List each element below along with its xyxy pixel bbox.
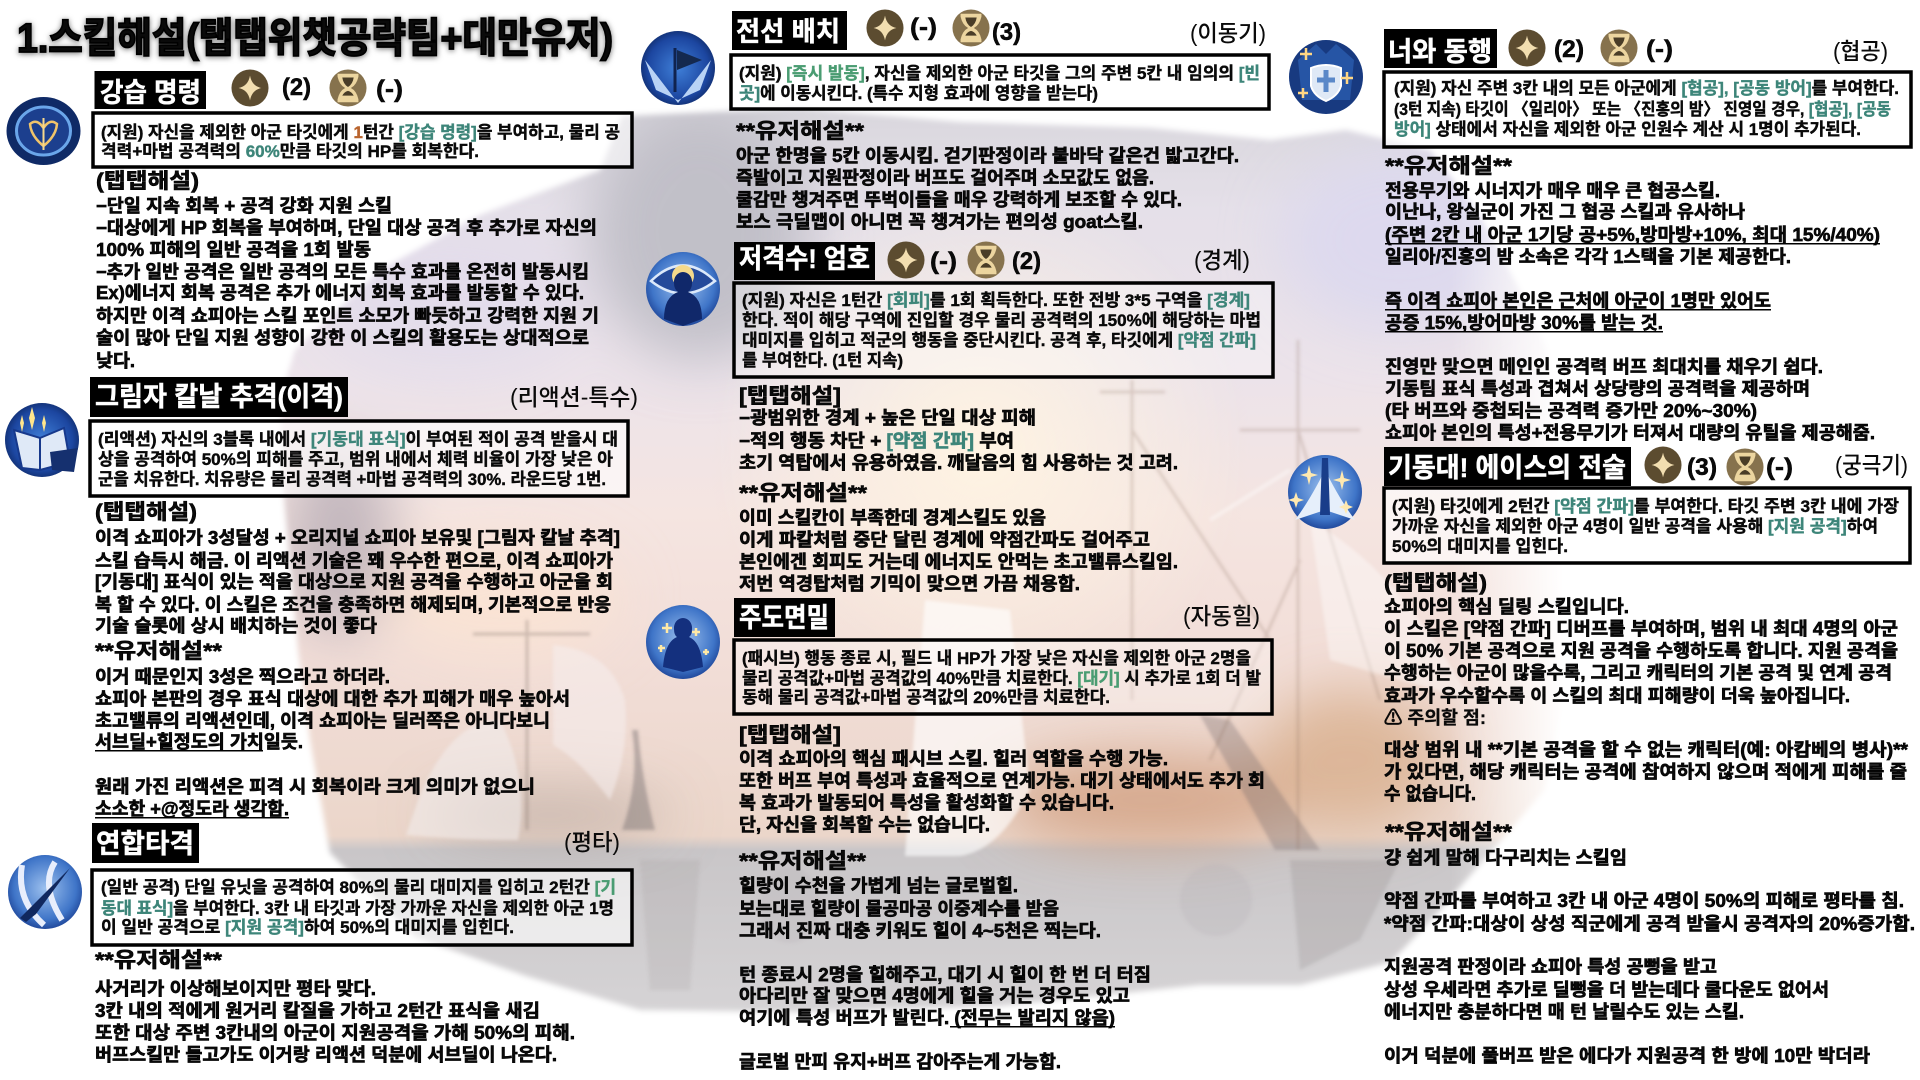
- commentary: 유저해설: 사거리가 이상해보이지만 평타 맞다.: [95, 979, 376, 999]
- commentary: 탭탭해설: 기술 슬롯에 상시 배치하는 것이 좋다: [95, 616, 377, 636]
- energy cost: (3): [1687, 454, 1717, 481]
- commentary: 유저해설: 공증 15%,방어마방 30%를 받는 것.: [1385, 313, 1663, 333]
- skill description box: 50%의 대미지를 입힌다.: [1392, 537, 1568, 556]
- commentary: 탭탭해설: [탭탭해설]: [739, 724, 841, 747]
- commentary: 탭탭해설: 대상 범위 내 **기본 공격을 할 수 없는 캐릭터(예: 아캄베의 병사)**: [1384, 740, 1908, 760]
- cooldown: (-): [376, 76, 403, 103]
- commentary: 유저해설: [736, 120, 1239, 232]
- skill description box: 이 일반 공격으로 [지원 공격]하여 50%의 대미지를 입힌다.: [101, 918, 514, 937]
- commentary: 탭탭해설: [739, 724, 1265, 835]
- commentary: 탭탭해설: −추가 일반 공격은 일반 공격의 모든 특수 효과를 온전히 발동시킴: [96, 262, 589, 282]
- commentary: 유저해설: 진영만 맞으면 메인인 공격력 버프 최대치를 채우기 쉽다.: [1385, 357, 1823, 377]
- commentary: 유저해설: 즉 이격 쇼피아 본인은 근처에 아군이 1명만 있어도: [1385, 291, 1771, 311]
- commentary: 탭탭해설: [96, 170, 599, 371]
- commentary: 탭탭해설: [1384, 572, 1908, 804]
- commentary: 유저해설: **유저해설**: [1385, 155, 1513, 178]
- panel: 너와 동행: [1289, 29, 1911, 443]
- energy cost: (-): [930, 248, 957, 275]
- icon: 기동대 에이스의 전술 skill: [1288, 455, 1362, 529]
- commentary: 유저해설: 소소한 +@정도라 생각함.: [95, 799, 289, 819]
- commentary: 유저해설: [95, 949, 575, 1065]
- commentary: 유저해설: [95, 640, 570, 819]
- skill name: 그림자 칼날 추격(이격): 그림자 칼날 추격(이격): [95, 382, 343, 412]
- commentary: 유저해설: **유저해설**: [736, 120, 865, 143]
- skill description box: (3턴 지속) 타깃이 〈일리아〉 또는 〈진홍의 밤〉 진영일 경우, [협공], [공동: [1394, 100, 1891, 119]
- commentary: 유저해설: 전용무기와 시너지가 매우 매우 큰 협공스킬.: [1385, 181, 1720, 201]
- commentary: 탭탭해설: −단일 지속 회복 + 공격 강화 지원 스킬: [96, 196, 392, 216]
- commentary: 유저해설: 지원공격 판정이라 쇼피아 특성 공뻥을 받고: [1384, 957, 1717, 977]
- panel: 저격수! 엄호: [646, 241, 1273, 594]
- commentary: 탭탭해설: 복 효과가 발동되어 특성을 활성화할 수 있습니다.: [739, 793, 1114, 813]
- commentary: 탭탭해설: 가 있다면, 해당 캐릭터는 공격에 참여하지 않으며 적에게 피해를 줄: [1384, 762, 1907, 782]
- commentary: 탭탭해설: 낮다.: [96, 351, 135, 371]
- skill type tag: (자동힐): [1183, 603, 1260, 629]
- commentary: 유저해설: 아군 한명을 5칸 이동시킴. 걷기판정이라 불바닥 같은건 밟고간다.: [736, 146, 1239, 166]
- commentary: 유저해설: 일리아/진홍의 밤 소속은 각각 1스택을 기본 제공한다.: [1385, 247, 1791, 267]
- commentary: 유저해설: 본인에겐 회피도 거는데 에너지도 안먹는 초고밸류스킬임.: [739, 552, 1178, 572]
- commentary: 유저해설: **유저해설**: [95, 640, 223, 663]
- commentary: 유저해설: 약점 간파를 부여하고 3칸 내 아군 4명이 50%의 피해로 평타를 침.: [1384, 891, 1904, 911]
- cooldown: [952, 9, 1021, 47]
- skill type tag: (경계): [1194, 247, 1250, 273]
- commentary: 유저해설: **유저해설**: [739, 482, 868, 505]
- commentary: 탭탭해설: (탭탭해설): [1384, 572, 1487, 595]
- commentary: 탭탭해설: 이격 쇼피아가 3성달성 + 오리지널 쇼피아 보유및 [그림자 칼날 추격]: [95, 528, 620, 548]
- cooldown: (-): [1766, 454, 1793, 481]
- skill description box: (지원) 자신은 1턴간 [회피]를 1회 획득한다. 또한 전방 3*5 구역을 [경계]: [742, 291, 1250, 310]
- commentary: 유저해설: 턴 종료시 2명을 힐해주고, 대기 시 힐이 한 번 더 터짐: [739, 965, 1151, 985]
- skill description box: [734, 283, 1273, 377]
- commentary: 유저해설: [1385, 155, 1880, 443]
- commentary: 유저해설: 기동팀 표식 특성과 겹쳐서 상당량의 공격력을 제공하며: [1385, 379, 1810, 399]
- commentary: 탭탭해설: [95, 501, 620, 636]
- commentary: 탭탭해설: (탭탭해설): [96, 170, 199, 193]
- skill name: 연합타격: 연합타격: [96, 829, 194, 859]
- energy cost: (-): [910, 14, 937, 41]
- commentary: 탭탭해설: 쇼피아의 핵심 딜링 스킬입니다.: [1384, 597, 1629, 617]
- commentary: 탭탭해설: −적의 행동 차단 + [약점 간파] 부여: [739, 431, 1014, 451]
- energy cost: [866, 9, 937, 47]
- skill description box: 물리 공격값+마법 공격값의 40%만큼 치료한다. [대기] 시 추가로 1회 더 발: [742, 669, 1261, 688]
- commentary: 유저해설: (타 버프와 중첩되는 공격력 증가만 20%~30%): [1385, 401, 1757, 421]
- commentary: 탭탭해설: 수행하는 아군이 많을수록, 그리고 캐릭터의 기본 공격 및 연계 공격: [1384, 663, 1892, 683]
- energy cost: (2): [1554, 36, 1584, 63]
- commentary: 유저해설: 초고밸류의 리액션인데, 이격 쇼피아는 딜러쪽은 아니다보니: [95, 711, 550, 731]
- commentary: 탭탭해설: 이 50% 기본 공격으로 지원 공격을 수행하도록 합니다. 지원 공격을: [1384, 641, 1898, 661]
- commentary: 탭탭해설: 수 없습니다.: [1384, 784, 1476, 804]
- skill name: 저격수! 엄호: 저격수! 엄호: [739, 244, 870, 274]
- commentary: 유저해설: 원래 가진 리액션은 피격 시 회복이라 크게 의미가 없으니: [95, 777, 535, 797]
- commentary: 유저해설: 여기에 특성 버프가 발린다. (전무는 발리지 않음): [739, 1008, 1115, 1028]
- commentary: 탭탭해설: [739, 385, 1178, 473]
- commentary: 탭탭해설: −광범위한 경계 + 높은 단일 대상 피해: [739, 408, 1036, 428]
- skill description box: (패시브) 행동 종료 시, 필드 내 HP가 가장 낮은 자신을 제외한 아군 2명을: [742, 649, 1251, 668]
- commentary: 유저해설: 이난나, 왕실군이 가진 그 협공 스킬과 유사하나: [1385, 202, 1745, 222]
- skill name: 강습 명령: 강습 명령: [100, 78, 201, 108]
- commentary: 탭탭해설: 스킬 습득시 해금. 이 리액션 기술은 꽤 우수한 편으로, 이격 쇼피아가: [95, 551, 613, 571]
- panel: 강습 명령: [6, 69, 632, 371]
- cooldown: [329, 69, 403, 107]
- commentary: 유저해설: 아다리만 잘 맞으면 4명에게 힐을 거는 경우도 있고: [739, 986, 1130, 1006]
- commentary: 유저해설: 보스 극딜맵이 아니면 꼭 챙겨가는 편의성 goat스킬.: [736, 212, 1143, 232]
- commentary: 탭탭해설: 초기 역탑에서 유용하였음. 깨달음의 힘 사용하는 것 고려.: [739, 453, 1178, 473]
- commentary: 탭탭해설: 복 할 수 있다. 이 스킬은 조건을 충족하면 해제되며, 기본적으로 반응: [95, 595, 611, 615]
- icon: 전선 배치 skill: [641, 31, 715, 105]
- commentary: 유저해설: 걍 쉽게 말해 다구리치는 스킬임: [1384, 848, 1627, 868]
- skill description box: 곳]에 이동시킨다. (특수 지형 효과에 영향을 받는다): [739, 84, 1098, 103]
- icon: 연합타격 skill: [8, 855, 82, 929]
- commentary: 유저해설: [739, 850, 1151, 1072]
- commentary: 유저해설: **유저해설**: [1385, 821, 1513, 844]
- icon: 주도면밀 skill: [646, 605, 720, 679]
- skill name: 주도면밀: 주도면밀: [739, 603, 829, 633]
- commentary: 탭탭해설: 하지만 이격 쇼피아는 스킬 포인트 소모가 빠듯하고 강력한 지원 기: [96, 306, 599, 326]
- commentary: 탭탭해설: 이격 쇼피아의 핵심 패시브 스킬. 힐러 역할을 수행 가능.: [739, 749, 1168, 769]
- cooldown: [967, 241, 1041, 279]
- energy cost: (2): [282, 74, 311, 101]
- energy cost: [231, 69, 311, 107]
- skill description box: 한다. 적이 해당 구역에 진입할 경우 물리 공격력의 150%에 해당하는 마법: [742, 311, 1261, 330]
- commentary: 유저해설: 버프스킬만 들고가도 이거랑 리액션 덕분에 서브딜이 나온다.: [95, 1045, 557, 1065]
- cooldown: [1600, 29, 1673, 67]
- skill description box: [734, 640, 1272, 714]
- commentary: 유저해설: 쇼피아 본판의 경우 표식 대상에 대한 추가 피해가 매우 높아서: [95, 689, 570, 709]
- skill description box: [92, 870, 632, 945]
- commentary: 탭탭해설: (탭탭해설): [95, 501, 197, 524]
- commentary: 탭탭해설: 이 스킬은 [약점 간파] 디버프를 부여하며, 범위 내 최대 4명의 아군: [1384, 619, 1898, 639]
- skill description box: [90, 421, 628, 496]
- commentary: 탭탭해설: [탭탭해설]: [739, 385, 841, 408]
- skill description box: (지원) [즉시 발동], 자신을 제외한 아군 타깃을 그의 주변 5칸 내 임의의 [빈: [739, 64, 1260, 83]
- energy cost: [1508, 29, 1584, 67]
- skill description box: (지원) 자신을 제외한 아군 타깃에게 1턴간 [강습 명령]을 부여하고, 물리 공: [101, 123, 620, 142]
- skill description box: 방어] 상태에서 자신을 제외한 아군 인원수 계산 시 1명이 추가된다.: [1394, 120, 1861, 139]
- commentary: 유저해설: 3칸 내의 적에게 원거리 칼질을 가하고 2턴간 표식을 새김: [95, 1001, 540, 1021]
- commentary: 탭탭해설: [기동대] 표식이 있는 적을 대상으로 지원 공격을 수행하고 아군을 회: [95, 572, 613, 592]
- panel: 전선 배치: [641, 9, 1269, 232]
- commentary: 유저해설: *약점 간파:대상이 상성 직군에게 공격 받을시 공격자의 20%증가함.: [1384, 914, 1915, 934]
- skill description box: (일반 공격) 단일 유닛을 공격하여 80%의 물리 대미지를 입히고 2턴간 [기: [101, 878, 616, 897]
- commentary: 유저해설: 쿨감만 챙겨주면 뚜벅이들을 매우 강력하게 보조할 수 있다.: [736, 190, 1182, 210]
- skill type tag: (이동기): [1190, 20, 1266, 46]
- commentary: 탭탭해설: −대상에게 HP 회복을 부여하며, 단일 대상 공격 후 추가로 자신의: [96, 218, 597, 238]
- background painting: ship and sunset brush stroke: [279, 108, 1544, 1014]
- commentary: 유저해설: 이게 파칼처럼 중단 달린 경계에 약점간파도 걸어주고: [739, 530, 1150, 550]
- skill name: 기동대! 에이스의 전술: 기동대! 에이스의 전술: [1388, 453, 1626, 483]
- icon: 저격수 엄호 skill: [646, 252, 720, 326]
- cooldown: (2): [1012, 248, 1041, 275]
- commentary: 탭탭해설: 술이 많아 단일 지원 성향이 강한 이 스킬의 활용도는 상대적으로: [96, 328, 589, 348]
- skill description box: 동대 표식]을 부여한다. 3칸 내 타깃과 가장 가까운 자신을 제외한 아군 1명: [101, 899, 614, 918]
- cooldown: (-): [1646, 36, 1673, 63]
- skill type tag: (평타): [564, 829, 620, 855]
- commentary: 탭탭해설: Ex)에너지 회복 공격은 추가 에너지 회복 효과를 발동할 수 있다.: [96, 283, 584, 303]
- icon: 그림자 칼날 추격 skill: [5, 403, 79, 477]
- commentary: 유저해설: [1384, 821, 1915, 1066]
- commentary: 유저해설: **유저해설**: [95, 949, 223, 972]
- energy cost: [887, 241, 957, 279]
- skill description box: [1384, 488, 1910, 563]
- commentary: 탭탭해설: ⚠ 주의할 점:: [1384, 708, 1486, 728]
- commentary: 유저해설: **유저해설**: [739, 850, 867, 873]
- commentary: 유저해설: 즉발이고 지원판정이라 버프도 걸어주며 소모값도 없음.: [736, 168, 1154, 188]
- energy cost: [1644, 446, 1717, 484]
- skill name: 전선 배치: 전선 배치: [736, 17, 840, 47]
- skill description box: 상을 공격하여 50%의 피해를 주고, 범위 내에서 체력 비율이 가장 낮은 아: [98, 450, 613, 469]
- skill description box: 를 부여한다. (1턴 지속): [742, 351, 903, 370]
- skill description box: (리액션) 자신의 3블록 내에서 [기동대 표식]이 부여된 적이 공격 받을시 대: [98, 430, 618, 449]
- commentary: 유저해설: 그래서 진짜 대충 키워도 힐이 4~5천은 찍는다.: [739, 921, 1101, 941]
- skill type tag: (궁극기): [1835, 452, 1908, 478]
- skill type tag: (리액션-특수): [510, 384, 638, 410]
- panel: 그림자 칼날 추격: [5, 377, 638, 819]
- commentary: 유저해설: 에너지만 충분하다면 매 턴 날릴수도 있는 스킬.: [1384, 1002, 1744, 1022]
- skill description box: 대미지를 입히고 적군의 행동을 중단시킨다. 공격 후, 타깃에게 [약점 간파]: [742, 331, 1256, 350]
- skill description box: 군을 치유한다. 치유량은 물리 공격력 +마법 공격력의 30%. 라운드당 1번.: [98, 470, 606, 489]
- skill name: 너와 동행: 너와 동행: [1388, 37, 1492, 67]
- panel: 연합타격: [8, 823, 632, 1065]
- skill description box: 가까운 자신을 제외한 아군 4명이 일반 공격을 사용해 [지원 공격]하여: [1392, 517, 1878, 536]
- panel: 주도면밀: [646, 598, 1272, 1072]
- icon: 강습 명령 skill: [6, 97, 80, 165]
- commentary: 유저해설: 서브딜+힐정도의 가치일듯.: [95, 732, 303, 752]
- skill description box: [1384, 72, 1911, 147]
- skill description box: 동해 물리 공격값+마법 공격값의 20%만큼 치료한다.: [742, 688, 1110, 707]
- cooldown: [1726, 448, 1793, 486]
- panel: 기동대! 에이스의 전술: [1288, 446, 1915, 1066]
- commentary: 유저해설: 쇼피아 본인의 특성+전용무기가 터져서 대량의 유틸을 제공해줌.: [1385, 423, 1875, 443]
- commentary: 탭탭해설: 효과가 우수할수록 이 스킬의 최대 피해량이 더욱 높아집니다.: [1384, 686, 1850, 706]
- commentary: 유저해설: 상성 우세라면 추가로 딜뻥을 더 받는데다 쿨다운도 없어서: [1384, 980, 1829, 1000]
- skill description box: [731, 55, 1269, 109]
- skill description box: (지원) 타깃에게 2턴간 [약점 간파]를 부여한다. 타깃 주변 3칸 내에 가장: [1392, 497, 1899, 516]
- skill name: 연합타격: [92, 823, 199, 863]
- commentary: 유저해설: 저번 역경탑처럼 기믹이 맞으면 가끔 채용함.: [739, 574, 1080, 594]
- icon: 너와 동행 skill: [1289, 40, 1363, 114]
- commentary: 유저해설: 힐량이 수천을 가볍게 넘는 글로벌힐.: [739, 876, 1018, 896]
- commentary: 유저해설: 또한 대상 주변 3칸내의 아군이 지원공격을 가해 50%의 피해.: [95, 1023, 575, 1043]
- skill description box: 격력+마법 공격력의 60%만큼 타깃의 HP를 회복한다.: [101, 142, 479, 161]
- commentary: 탭탭해설: 100% 피해의 일반 공격을 1회 발동: [96, 240, 371, 260]
- commentary: 유저해설: 이거 덕분에 풀버프 받은 에다가 지원공격 한 방에 10만 박더라: [1384, 1046, 1870, 1066]
- commentary: 유저해설: 보는대로 힐량이 물공마공 이중계수를 받음: [739, 899, 1059, 919]
- skill type tag: (협공): [1833, 38, 1888, 64]
- commentary: 유저해설: [739, 482, 1178, 594]
- cooldown: (3): [992, 19, 1021, 46]
- title: 1.스킬해설(탭탭위챗공략팀+대만유저): [17, 15, 613, 61]
- commentary: 탭탭해설: 또한 버프 부여 특성과 효율적으로 연계가능. 대기 상태에서도 추가 회: [739, 771, 1265, 791]
- skill description box: (지원) 자신 주변 3칸 내의 모든 아군에게 [협공], [공동 방어]를 부여한다.: [1394, 79, 1899, 98]
- commentary: 유저해설: 이거 때문인지 3성은 찍으라고 하더라.: [95, 667, 390, 687]
- skill description box: [93, 113, 632, 167]
- commentary: 유저해설: (주변 2칸 내 아군 1기당 공+5%,방마방+10%, 최대 15%/40%): [1385, 225, 1880, 245]
- commentary: 탭탭해설: 단, 자신을 회복할 수는 없습니다.: [739, 815, 990, 835]
- commentary: 유저해설: 글로벌 만피 유지+버프 감아주는게 가능함.: [739, 1052, 1061, 1072]
- commentary: 유저해설: 이미 스킬칸이 부족한데 경계스킬도 있음: [739, 508, 1046, 528]
